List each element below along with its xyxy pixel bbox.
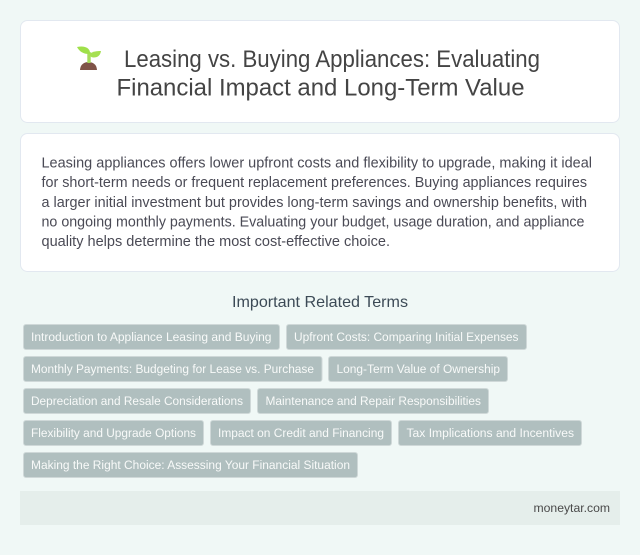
panel: summary text (20, 134, 620, 272)
chip: upfront costs: Upfront Costs: Comparing Initial Expenses (294, 330, 518, 344)
chip: credit: Impact on Credit and Financing (218, 426, 384, 440)
chip: long-term value: Long-Term Value of Ownership (336, 362, 500, 376)
title (116, 46, 540, 102)
chip group: related terms (24, 324, 582, 478)
chip: monthly payments: Monthly Payments: Budgeting for Lease vs. Purchase (31, 362, 314, 376)
text block: summary: for short-term needs or frequent replacement preferences. Buying appliances requires (42, 175, 587, 191)
text block: summary: a larger initial investment but provides long-term savings and ownership benefits, with (42, 195, 587, 211)
chip: flexibility (24, 420, 204, 446)
text block: summary: no ongoing monthly payments. Evaluating your budget, usage duration, and appliance (42, 214, 584, 230)
panel: title card (20, 20, 620, 122)
chip: maintenance: Maintenance and Repair Responsibilities (266, 394, 481, 408)
chip: long-term value (328, 356, 508, 382)
chip: upfront costs (286, 324, 526, 350)
chip: right choice (24, 452, 358, 478)
chip: depreciation (24, 388, 250, 414)
chip: introduction: Introduction to Appliance Leasing and Buying (31, 330, 272, 344)
text block: summary: Leasing appliances offers lower upfront costs and flexibility to upgrade, making it ideal (42, 156, 592, 172)
chip: tax: Tax Implications and Incentives (406, 426, 574, 440)
footer: moneytar.com (534, 501, 610, 515)
chip: flexibility: Flexibility and Upgrade Options (31, 426, 196, 440)
chip: monthly payments (24, 356, 322, 382)
chip: tax (398, 420, 582, 446)
text block: summary (42, 156, 592, 250)
text block: summary: quality helps determine the most cost-effective choice. (42, 234, 390, 250)
chip: introduction (24, 324, 280, 350)
title: Leasing vs. Buying Appliances: Evaluating (124, 46, 540, 73)
chip: credit (210, 420, 392, 446)
chip: right choice: Making the Right Choice: Assessing Your Financial Situation (31, 458, 350, 472)
chip: maintenance (258, 388, 488, 414)
icon: seedling (77, 46, 101, 70)
title: Financial Impact and Long-Term Value (116, 74, 524, 102)
chip: depreciation: Depreciation and Resale Considerations (31, 394, 243, 408)
footer (20, 491, 620, 525)
heading: related terms: Important Related Terms (232, 294, 408, 311)
